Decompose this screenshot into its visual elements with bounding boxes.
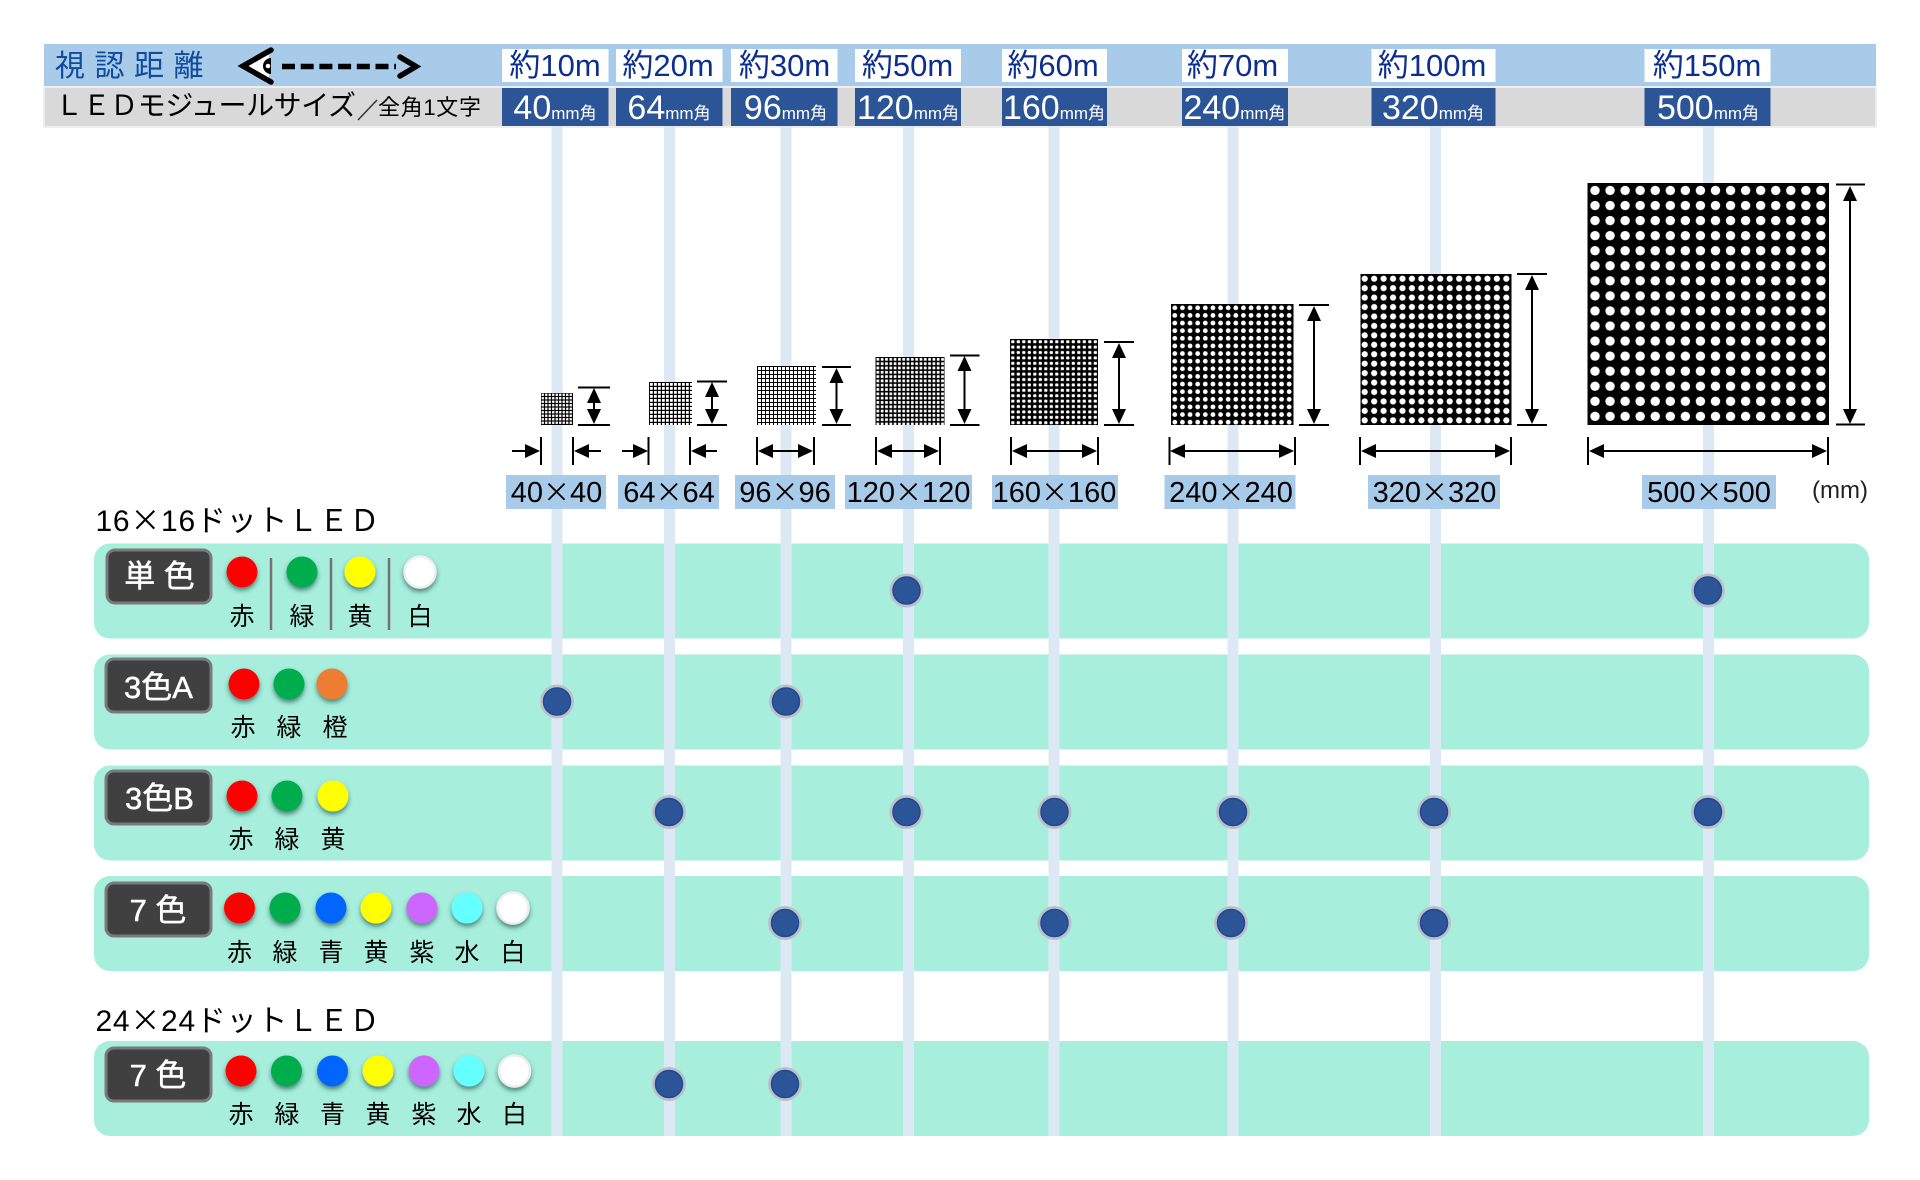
colour names: 緑 <box>276 714 302 742</box>
colour names: 青 <box>318 939 344 967</box>
column 5: 約60m / 160mm角: 160mm角 <box>1003 89 1105 127</box>
column 6: 約70m / 240mm角: 約70m <box>1187 48 1278 83</box>
module 120×120 with dimension arrows <box>876 356 980 465</box>
colour names: 黄 <box>365 1101 391 1129</box>
column 8: 約150m / 500mm角 <box>1644 48 1770 127</box>
icon: eye with dashed arrow <box>243 50 416 82</box>
heading: 16×16 dot LED: 16×16ドットＬＥＤ <box>96 496 380 540</box>
colour names: 緑 <box>272 939 298 967</box>
colour names <box>227 939 526 967</box>
colour names: 橙 <box>322 714 348 742</box>
unit label: (mm) <box>1812 477 1868 504</box>
module 64×64 with dimension arrows <box>622 382 727 465</box>
module 160×160 with dimension arrows <box>1010 339 1134 465</box>
availability markers: 3色B <box>652 795 1725 829</box>
column 1: 約10m / 40mm角 <box>502 48 608 127</box>
colour names: 緑 <box>289 603 315 631</box>
colour names: 水 <box>456 1101 482 1129</box>
row background: 7色 24dot <box>94 1041 1869 1136</box>
row background: 7色 16dot <box>94 876 1869 971</box>
column 2: 約20m / 64mm角 <box>616 48 722 127</box>
dividers <box>271 558 389 630</box>
colour names <box>228 826 346 854</box>
colour names: 黄 <box>363 939 389 967</box>
legend: 7色 24dot <box>106 1048 530 1129</box>
badge: 7色 <box>106 1048 211 1101</box>
badge: 単色: 単 色 <box>124 559 195 594</box>
column 7: 約100m / 320mm角: 約100m <box>1378 48 1486 83</box>
colour names: 赤 <box>228 826 254 854</box>
badge: 7色: 7 色 <box>130 893 186 928</box>
dimension label 120×120: 120×120 <box>847 471 970 510</box>
colour names: 赤 <box>227 939 252 967</box>
colour dots <box>226 556 436 588</box>
row background: 3色A <box>94 654 1869 750</box>
colour names: 紫 <box>409 939 435 967</box>
column 1: 約10m / 40mm角: 約10m <box>509 48 601 83</box>
column 3: 約30m / 96mm角 <box>731 48 838 127</box>
colour dots <box>226 780 348 812</box>
badge: 単色 <box>107 550 211 603</box>
badge: 3色A: 3色A <box>124 670 193 705</box>
availability markers: 7色 24dot <box>652 1067 802 1101</box>
badge: 7色 <box>106 883 211 936</box>
badge: 3色B <box>106 771 211 824</box>
heading: 24×24 dot LED: 24×24ドットＬＥＤ <box>96 996 380 1040</box>
heading: LED module size: ＬＥＤモジュールサイズ <box>55 90 356 121</box>
module 500×500 with dimension arrows <box>1588 183 1865 465</box>
header band: viewing distance <box>44 44 1876 86</box>
heading: viewing distance: 視認距離 <box>55 50 213 83</box>
column 7: 約100m / 320mm角: 320mm角 <box>1382 89 1484 127</box>
badge: 3色A <box>106 659 211 712</box>
column 1: 約10m / 40mm角: 40mm角 <box>513 89 597 127</box>
colour names <box>228 1101 527 1129</box>
column 8: 約150m / 500mm角: 約150m <box>1653 48 1761 83</box>
module 96×96 with dimension arrows <box>757 366 851 465</box>
column 6: 約70m / 240mm角: 240mm角 <box>1183 89 1286 127</box>
dimension label 96×96: 96×96 <box>739 471 831 510</box>
colour names: 赤 <box>230 714 256 742</box>
dimension label 500×500: 500×500 <box>1647 471 1771 510</box>
column 2: 約20m / 64mm角: 64mm角 <box>627 89 711 127</box>
colour dots <box>224 892 528 924</box>
module 40×40 with dimension arrows <box>512 388 610 465</box>
header band: LED module size <box>44 87 1876 127</box>
badge: 7色: 7 色 <box>130 1058 186 1093</box>
column 5: 約60m / 160mm角 <box>1002 48 1107 127</box>
colour names: 紫 <box>411 1101 437 1129</box>
colour names <box>229 603 433 631</box>
heading: LED module size: 全角1文字 <box>378 95 481 120</box>
column 2: 約20m / 64mm角: 約20m <box>622 48 714 83</box>
colour names: 赤 <box>228 1101 254 1129</box>
availability markers: 単色 <box>890 574 1725 608</box>
column 7: 約100m / 320mm角 <box>1372 48 1496 127</box>
colour names: 白 <box>407 603 433 631</box>
colour names: 赤 <box>229 603 255 631</box>
dimension label 160×160: 160×160 <box>993 471 1116 510</box>
colour names: 青 <box>320 1101 345 1129</box>
colour names: 緑 <box>274 1101 300 1129</box>
colour names: 黄 <box>320 826 346 854</box>
colour names: 黄 <box>347 603 373 631</box>
availability markers: 3色A <box>540 684 803 718</box>
module 320×320 with dimension arrows <box>1360 274 1547 465</box>
dimension label 64×64: 64×64 <box>623 471 715 510</box>
dimension label 40×40: 40×40 <box>511 471 602 510</box>
column 8: 約150m / 500mm角: 500mm角 <box>1657 89 1759 127</box>
legend: 7色 16dot <box>106 883 528 967</box>
availability markers: 7色 16dot <box>768 906 1451 940</box>
column 3: 約30m / 96mm角: 約30m <box>739 48 830 83</box>
colour dots <box>228 668 348 700</box>
row background: 単色 <box>94 544 1869 638</box>
column 4: 約50m / 120mm角 <box>855 48 961 127</box>
colour dots <box>226 1056 530 1086</box>
column 3: 約30m / 96mm角: 96mm角 <box>744 89 827 127</box>
colour names: 水 <box>454 939 480 967</box>
colour names <box>230 714 348 742</box>
dimension label 240×240: 240×240 <box>1169 471 1293 510</box>
colour names: 白 <box>502 1101 527 1129</box>
column 4: 約50m / 120mm角: 120mm角 <box>857 89 959 127</box>
vertical guide bands <box>552 126 1714 1136</box>
dimension label 320×320: 320×320 <box>1373 471 1496 510</box>
colour names: 緑 <box>274 826 300 854</box>
column 5: 約60m / 160mm角: 約60m <box>1007 48 1099 83</box>
module 240×240 with dimension arrows <box>1170 304 1329 465</box>
badge: 3色B: 3色B <box>125 781 194 816</box>
colour names: 白 <box>500 939 526 967</box>
column 4: 約50m / 120mm角: 約50m <box>862 48 953 83</box>
column 6: 約70m / 240mm角 <box>1182 48 1288 127</box>
legend: 単色 <box>107 550 436 631</box>
legend: 3色B <box>106 771 348 854</box>
row background: 3色B <box>94 766 1869 860</box>
legend: 3色A <box>106 659 348 742</box>
